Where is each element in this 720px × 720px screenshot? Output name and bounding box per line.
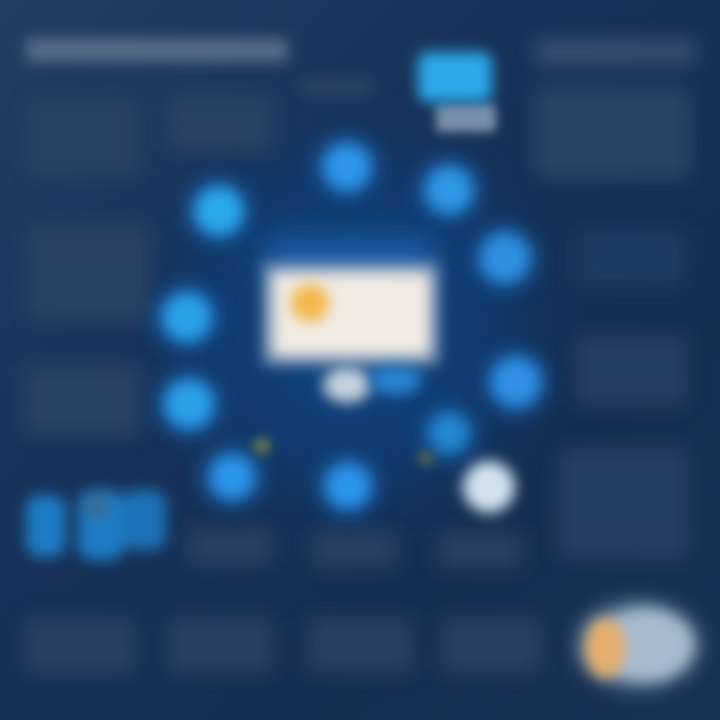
- text block: right upper: [535, 88, 690, 178]
- node: upper right: [427, 168, 471, 212]
- panel: right text column: [535, 40, 695, 558]
- text block: right middle: [575, 228, 687, 288]
- glow layer: [156, 137, 547, 515]
- blob dark centre: [86, 495, 110, 519]
- text block: bottom 4: [442, 618, 540, 673]
- subtitle: [302, 78, 372, 96]
- badge body: [597, 609, 693, 681]
- heading: right column: [535, 40, 695, 64]
- blob left: [26, 495, 66, 557]
- panel: bottom text row: [25, 528, 540, 673]
- monitor glow: [265, 238, 435, 278]
- text block: right bottom: [558, 448, 688, 558]
- blob centre: [78, 490, 124, 560]
- text block: row 2: [28, 225, 148, 320]
- monitor screen: [272, 272, 430, 356]
- monitor stand glow: [370, 365, 422, 395]
- text block: right lower: [575, 335, 687, 405]
- node: bottom: [327, 465, 369, 507]
- node: right lower: [493, 359, 539, 405]
- accent: olive right: [418, 450, 434, 466]
- text block: bottom 1: [25, 618, 135, 673]
- text block: mid bottom 2: [312, 532, 397, 568]
- node: right upper: [482, 235, 528, 281]
- text block: row 1 left: [28, 100, 138, 175]
- badge glow: [576, 601, 700, 689]
- text block: row 3: [25, 365, 140, 435]
- node: lower left: [211, 456, 253, 498]
- text block: row 1 right: [168, 95, 273, 150]
- monitor: [262, 238, 440, 403]
- monitor stand: [323, 367, 371, 403]
- icon: bottom left blue group: [26, 490, 166, 560]
- card blue: [418, 52, 492, 102]
- node: left upper: [164, 294, 210, 340]
- node ring: [156, 137, 547, 515]
- text block: mid bottom 3: [437, 532, 522, 568]
- node: white: [463, 461, 515, 513]
- node: upper left: [196, 188, 242, 234]
- central halo: [110, 85, 590, 565]
- node: top: [325, 145, 369, 189]
- icon: top right card: [418, 52, 496, 132]
- icon: bottom right badge: [576, 601, 700, 689]
- blob right: [122, 490, 166, 550]
- card base: [436, 104, 496, 132]
- text block: mid bottom 1: [188, 528, 273, 564]
- monitor frame glow: [262, 262, 440, 366]
- accent: olive left: [253, 437, 271, 455]
- node: lower right: [431, 415, 467, 451]
- text block: bottom 2: [168, 618, 273, 673]
- panel: left text column: [25, 95, 273, 435]
- title: [26, 38, 288, 62]
- node: left lower: [166, 381, 212, 427]
- monitor orange icon: [291, 284, 329, 322]
- badge orange: [585, 618, 625, 678]
- text block: bottom 3: [308, 618, 413, 673]
